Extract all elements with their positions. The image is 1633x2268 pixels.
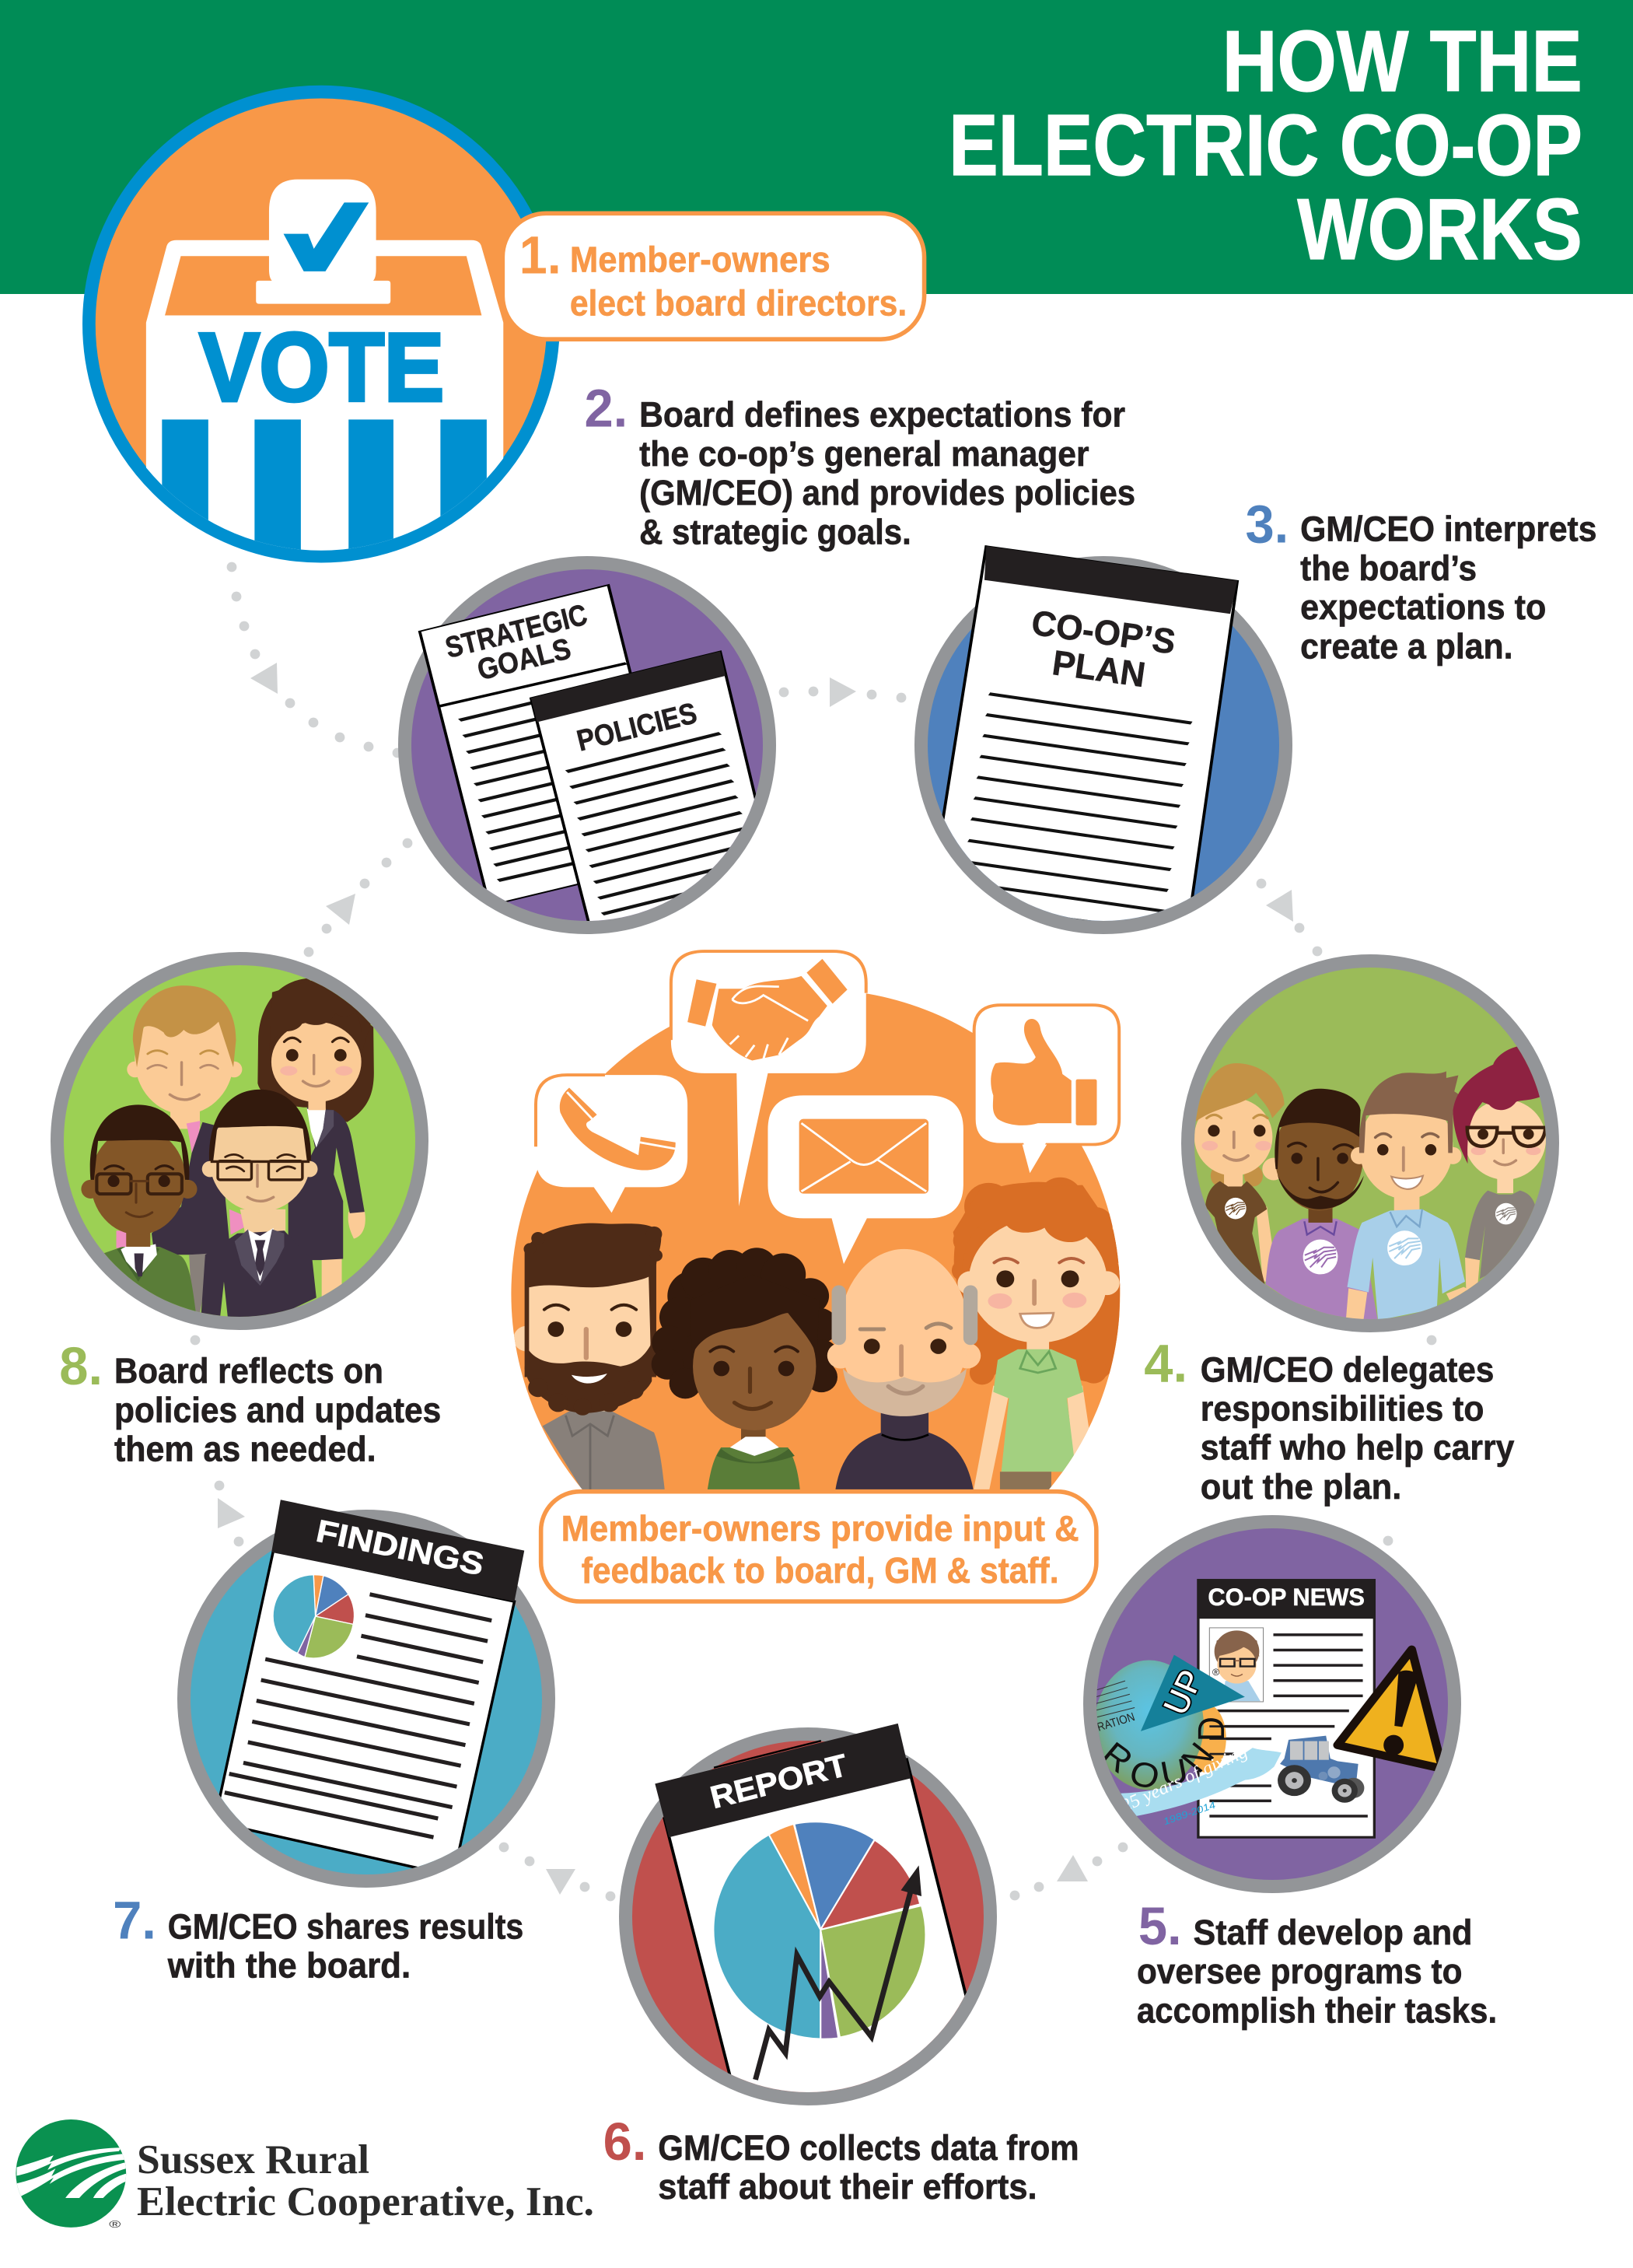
flow arrows: dotted connectors between steps — [191, 562, 1436, 1901]
text: step 3: the board’s — [1300, 548, 1477, 588]
text: step 8: them as needed. — [114, 1430, 376, 1469]
text: step 3: GM/CEO interprets — [1300, 509, 1596, 549]
board member: man with green sweater — [81, 1104, 211, 1314]
document: co-op news — [1197, 1579, 1376, 1837]
company name: Electric Cooperative, Inc. — [137, 2179, 594, 2224]
speech bubble: envelope — [768, 1095, 963, 1264]
text: step 3: expectations to — [1300, 587, 1546, 627]
text: step 2 — [584, 379, 1135, 551]
person: older bald man — [827, 1249, 981, 1494]
text: step 2: (GM/CEO) and provides policies — [639, 473, 1135, 513]
text: step 5 — [1137, 1896, 1497, 2030]
logo: Sussex Rural Electric Cooperative — [16, 2119, 594, 2230]
text: step 3: 3. — [1245, 495, 1289, 555]
text: step 4: GM/CEO delegates — [1201, 1349, 1494, 1389]
panel: co-op's plan document: PLAN — [1050, 642, 1148, 695]
text: step 4: out the plan. — [1201, 1467, 1401, 1507]
speech bubble: thumbs up — [974, 1005, 1119, 1173]
callout: member-owners input: Member-owners provide input & — [561, 1508, 1079, 1549]
text: step 2: 2. — [584, 379, 628, 439]
panel: report document with pie chart: REPORT — [707, 1747, 851, 1815]
text: step 8: 8. — [59, 1336, 103, 1396]
callout: member-owners input — [541, 1492, 1096, 1601]
icon: vote ballot box: VOTE — [200, 313, 444, 422]
person: curly-haired woman — [652, 1248, 838, 1494]
text: step 5: Staff develop and — [1194, 1913, 1472, 1952]
text: step 7: with the board. — [167, 1946, 411, 1986]
panel: staff group illustration — [1188, 961, 1552, 1325]
staff member: man with blue shirt — [1346, 1071, 1474, 1321]
icon: tractor — [1278, 1736, 1364, 1803]
title — [949, 12, 1582, 278]
callout: member-owners input: feedback to board, GM & staff. — [582, 1550, 1059, 1591]
callout: step 1: Member-owners — [570, 240, 830, 280]
text: step 6 — [603, 2112, 1079, 2207]
panel: co-op's plan document: CO-OP’S — [1030, 603, 1178, 662]
ribbon: 25 years of giving: 1989-2014 — [1162, 1799, 1217, 1827]
text: step 6: 6. — [603, 2112, 646, 2172]
staff member: blonde woman — [1193, 1063, 1285, 1287]
text: step 3: create a plan. — [1300, 626, 1513, 666]
panel: strategic goals and policies documents — [404, 563, 790, 941]
logo: operation round up: ® — [1212, 1668, 1219, 1678]
line chart arrow — [755, 1865, 921, 2080]
title: HOW THE — [1222, 12, 1582, 110]
logo mark — [16, 2119, 126, 2230]
panel: board group illustration — [58, 958, 421, 1324]
panel: findings document with pie chart: FINDINGS — [313, 1513, 487, 1582]
text: step 6: GM/CEO collects data from — [658, 2128, 1079, 2168]
panel: strategic goals and policies documents: POLICIES — [574, 697, 700, 758]
text: step 6: staff about their efforts. — [658, 2167, 1037, 2207]
speech bubble: handshake — [671, 951, 866, 1206]
logo: operation round up: O — [1125, 1752, 1164, 1797]
person: bearded man — [513, 1223, 665, 1494]
document: co-op news: CO-OP NEWS — [1208, 1583, 1365, 1611]
panel: report document with pie chart — [619, 1724, 997, 2105]
staff member: woman with glasses — [1453, 1046, 1547, 1297]
panel: newsletter documents with warning and tractor — [1090, 1521, 1454, 1887]
staff member: bald-fade man — [1262, 1089, 1378, 1321]
text: step 4: staff who help carry — [1201, 1428, 1515, 1468]
text: step 5: oversee programs to — [1137, 1951, 1462, 1991]
callout: step 1 — [502, 213, 925, 339]
ribbon: 25 years of giving — [1121, 1748, 1282, 1825]
logo: operation round up: D — [1191, 1717, 1233, 1741]
person: red-haired woman — [952, 1178, 1125, 1493]
text: step 8 — [59, 1336, 441, 1469]
text: step 4: responsibilities to — [1201, 1389, 1484, 1429]
company name: Sussex Rural — [137, 2137, 369, 2182]
logo: operation round up: U — [1157, 1751, 1191, 1794]
logo: operation round up: R — [1093, 1734, 1141, 1780]
board member: blonde man — [117, 985, 248, 1255]
board member: front man in suit — [201, 1090, 318, 1319]
ribbon: 25 years of giving: 25 years of giving — [1117, 1741, 1251, 1816]
text: step 8: policies and updates — [114, 1390, 441, 1430]
speech bubble: telephone — [536, 1075, 687, 1213]
panel: member-owners illustration — [511, 951, 1125, 1598]
text: step 2: the co-op’s general manager — [639, 434, 1089, 474]
callout: step 1: 1. — [519, 226, 561, 285]
text: step 5: 5. — [1138, 1896, 1182, 1956]
text: step 7 — [113, 1890, 523, 1986]
text: step 5: accomplish their tasks. — [1137, 1990, 1497, 2030]
company name — [137, 2137, 594, 2224]
text: step 2: Board defines expectations for — [639, 395, 1125, 435]
pie chart — [713, 1822, 925, 2039]
panel: strategic goals and policies documents: STRATEGIC — [442, 599, 590, 665]
text: step 4: 4. — [1144, 1333, 1187, 1393]
title: WORKS — [1297, 180, 1582, 278]
header band — [0, 0, 1633, 294]
logo: operation round up: N — [1173, 1735, 1222, 1780]
text: step 4 — [1144, 1333, 1515, 1507]
icon: warning triangle — [1338, 1650, 1442, 1769]
text: step 3 — [1245, 495, 1596, 666]
panel: findings document with pie chart — [184, 1500, 549, 1881]
text: step 8: Board reflects on — [114, 1351, 383, 1391]
callout: step 1: elect board directors. — [570, 282, 907, 323]
text: step 7: 7. — [113, 1890, 156, 1950]
logo mark: ® — [109, 2218, 121, 2230]
pie chart — [273, 1575, 355, 1658]
text: step 7: GM/CEO shares results — [168, 1906, 523, 1946]
logo: operation round up — [1093, 1655, 1245, 1797]
panel: co-op's plan document — [921, 546, 1286, 930]
icon: vote ballot box — [89, 92, 553, 579]
logo: operation round up: RATION — [1096, 1711, 1137, 1734]
board member: woman with dark hair — [257, 976, 374, 1300]
logo: operation round up: UP — [1156, 1664, 1212, 1720]
panel: strategic goals and policies documents: GOALS — [474, 632, 574, 687]
text: step 2: & strategic goals. — [639, 512, 911, 551]
